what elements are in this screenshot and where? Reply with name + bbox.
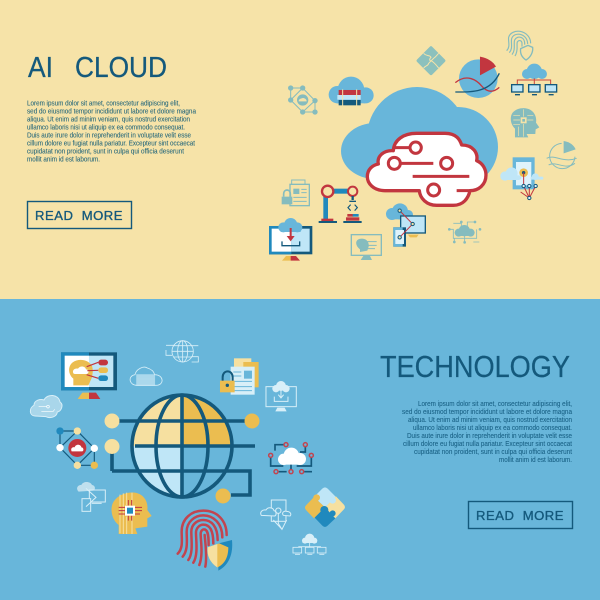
icon: teal cloud circuit <box>448 221 481 244</box>
text block: lorem ipsum: Lorem ipsum dolor sit amet, consectetur adipiscing elit, <box>27 98 180 108</box>
heading: TECHNOLOGY: TECHNOLOGY <box>380 349 570 384</box>
icon: white globe outline <box>166 341 198 362</box>
text block: lorem ipsum right aligned: aliqua. Ut enim ad minim veniam, quis nostrud exercitation <box>408 415 572 424</box>
icon: network with red cloud <box>56 427 98 469</box>
icon: white monitor with cloud <box>266 381 296 411</box>
panel: AI cloud <box>0 0 600 299</box>
text block: lorem ipsum: ullamco laboris nisi ut aliquip ex ea commodo consequat. <box>27 122 185 132</box>
icon: teal head with chip <box>511 108 539 137</box>
icon: brain circuit cloud <box>367 133 486 205</box>
text block: lorem ipsum: aliqua. Ut enim ad minim veniam, quis nostrud exercitation <box>27 114 190 124</box>
icon: robot arm <box>319 186 362 223</box>
icon: lock and documents <box>220 358 259 395</box>
icon: white cloud with monitors <box>293 534 326 554</box>
icon: yellow head with chip <box>112 492 152 534</box>
icon: pie chart with waves <box>455 57 499 98</box>
icon: cloud linked devices <box>386 203 426 247</box>
icon: monitor with download cloud <box>269 218 312 261</box>
text block: lorem ipsum right aligned: cupidatat non proident, sunt in culpa qui officia deserunt <box>414 447 572 456</box>
icon: colored puzzle <box>305 487 345 527</box>
heading: AI CLOUD: AI <box>28 52 53 84</box>
icon: big cloud <box>341 87 498 187</box>
icon: white cloud devices <box>77 482 105 511</box>
text block: lorem ipsum right aligned: Lorem ipsum dolor sit amet, consectetur adipiscing elit, <box>418 399 572 408</box>
icon: cloud with server <box>329 77 374 106</box>
text block: lorem ipsum: mollit anim id est laborum. <box>27 154 100 164</box>
icon: phone with clouds and nodes <box>500 157 543 200</box>
text block: lorem ipsum <box>27 98 196 164</box>
icon: cloud network of monitors <box>512 64 557 95</box>
text block: lorem ipsum: cupidatat non proident, sunt in culpa qui officia deserunt <box>27 146 184 156</box>
text block: lorem ipsum right aligned: ullamco laboris nisi ut aliquip ex ea commodo consequat. <box>413 423 572 432</box>
icon: white cloud with server <box>130 367 162 385</box>
text block: lorem ipsum right aligned: Duis aute irure dolor in reprehenderit in voluptate velit esse <box>407 431 572 440</box>
text block: lorem ipsum: cillum dolore eu fugiat nulla pariatur. Excepteur sint occaecat <box>27 138 195 148</box>
text block: lorem ipsum right aligned <box>402 399 572 464</box>
button: read more: READ MORE <box>476 508 564 523</box>
icon: white cloud circuit brain <box>30 395 62 418</box>
icon: teal lock and documents <box>282 180 309 206</box>
heading: AI CLOUD: CLOUD <box>75 52 167 84</box>
text block: lorem ipsum right aligned: mollit anim id est laborum. <box>499 455 572 464</box>
icon: teal puzzle <box>416 46 446 76</box>
panel: technology <box>0 299 600 600</box>
icon: red fingerprint with shield <box>178 511 232 571</box>
icon: white cloud with circuit nodes <box>269 443 313 474</box>
icon: teal fingerprint with shield <box>507 31 533 60</box>
icon: white phone with clouds <box>261 500 291 529</box>
button: read more: READ MORE <box>35 208 123 223</box>
text block: lorem ipsum right aligned: sed do eiusmod tempor incididunt ut labore et dolore magna <box>402 407 572 416</box>
button: read more <box>28 202 132 228</box>
button: read more <box>468 502 572 528</box>
heading: AI CLOUD <box>28 52 167 84</box>
text block: lorem ipsum: Duis aute irure dolor in reprehenderit in voluptate velit esse <box>27 130 191 140</box>
icon: teal pie chart <box>547 141 577 169</box>
icon: monitor with head <box>61 352 117 399</box>
icon: globe with circuit lines <box>104 395 260 504</box>
icon: teal network cloud <box>288 85 318 115</box>
text block: lorem ipsum right aligned: cillum dolore eu fugiat nulla pariatur. Excepteur sint occaecat <box>403 439 572 448</box>
text block: lorem ipsum: sed do eiusmod tempor incididunt ut labore et dolore magna <box>27 106 196 116</box>
icon: teal monitor with head <box>351 235 381 260</box>
